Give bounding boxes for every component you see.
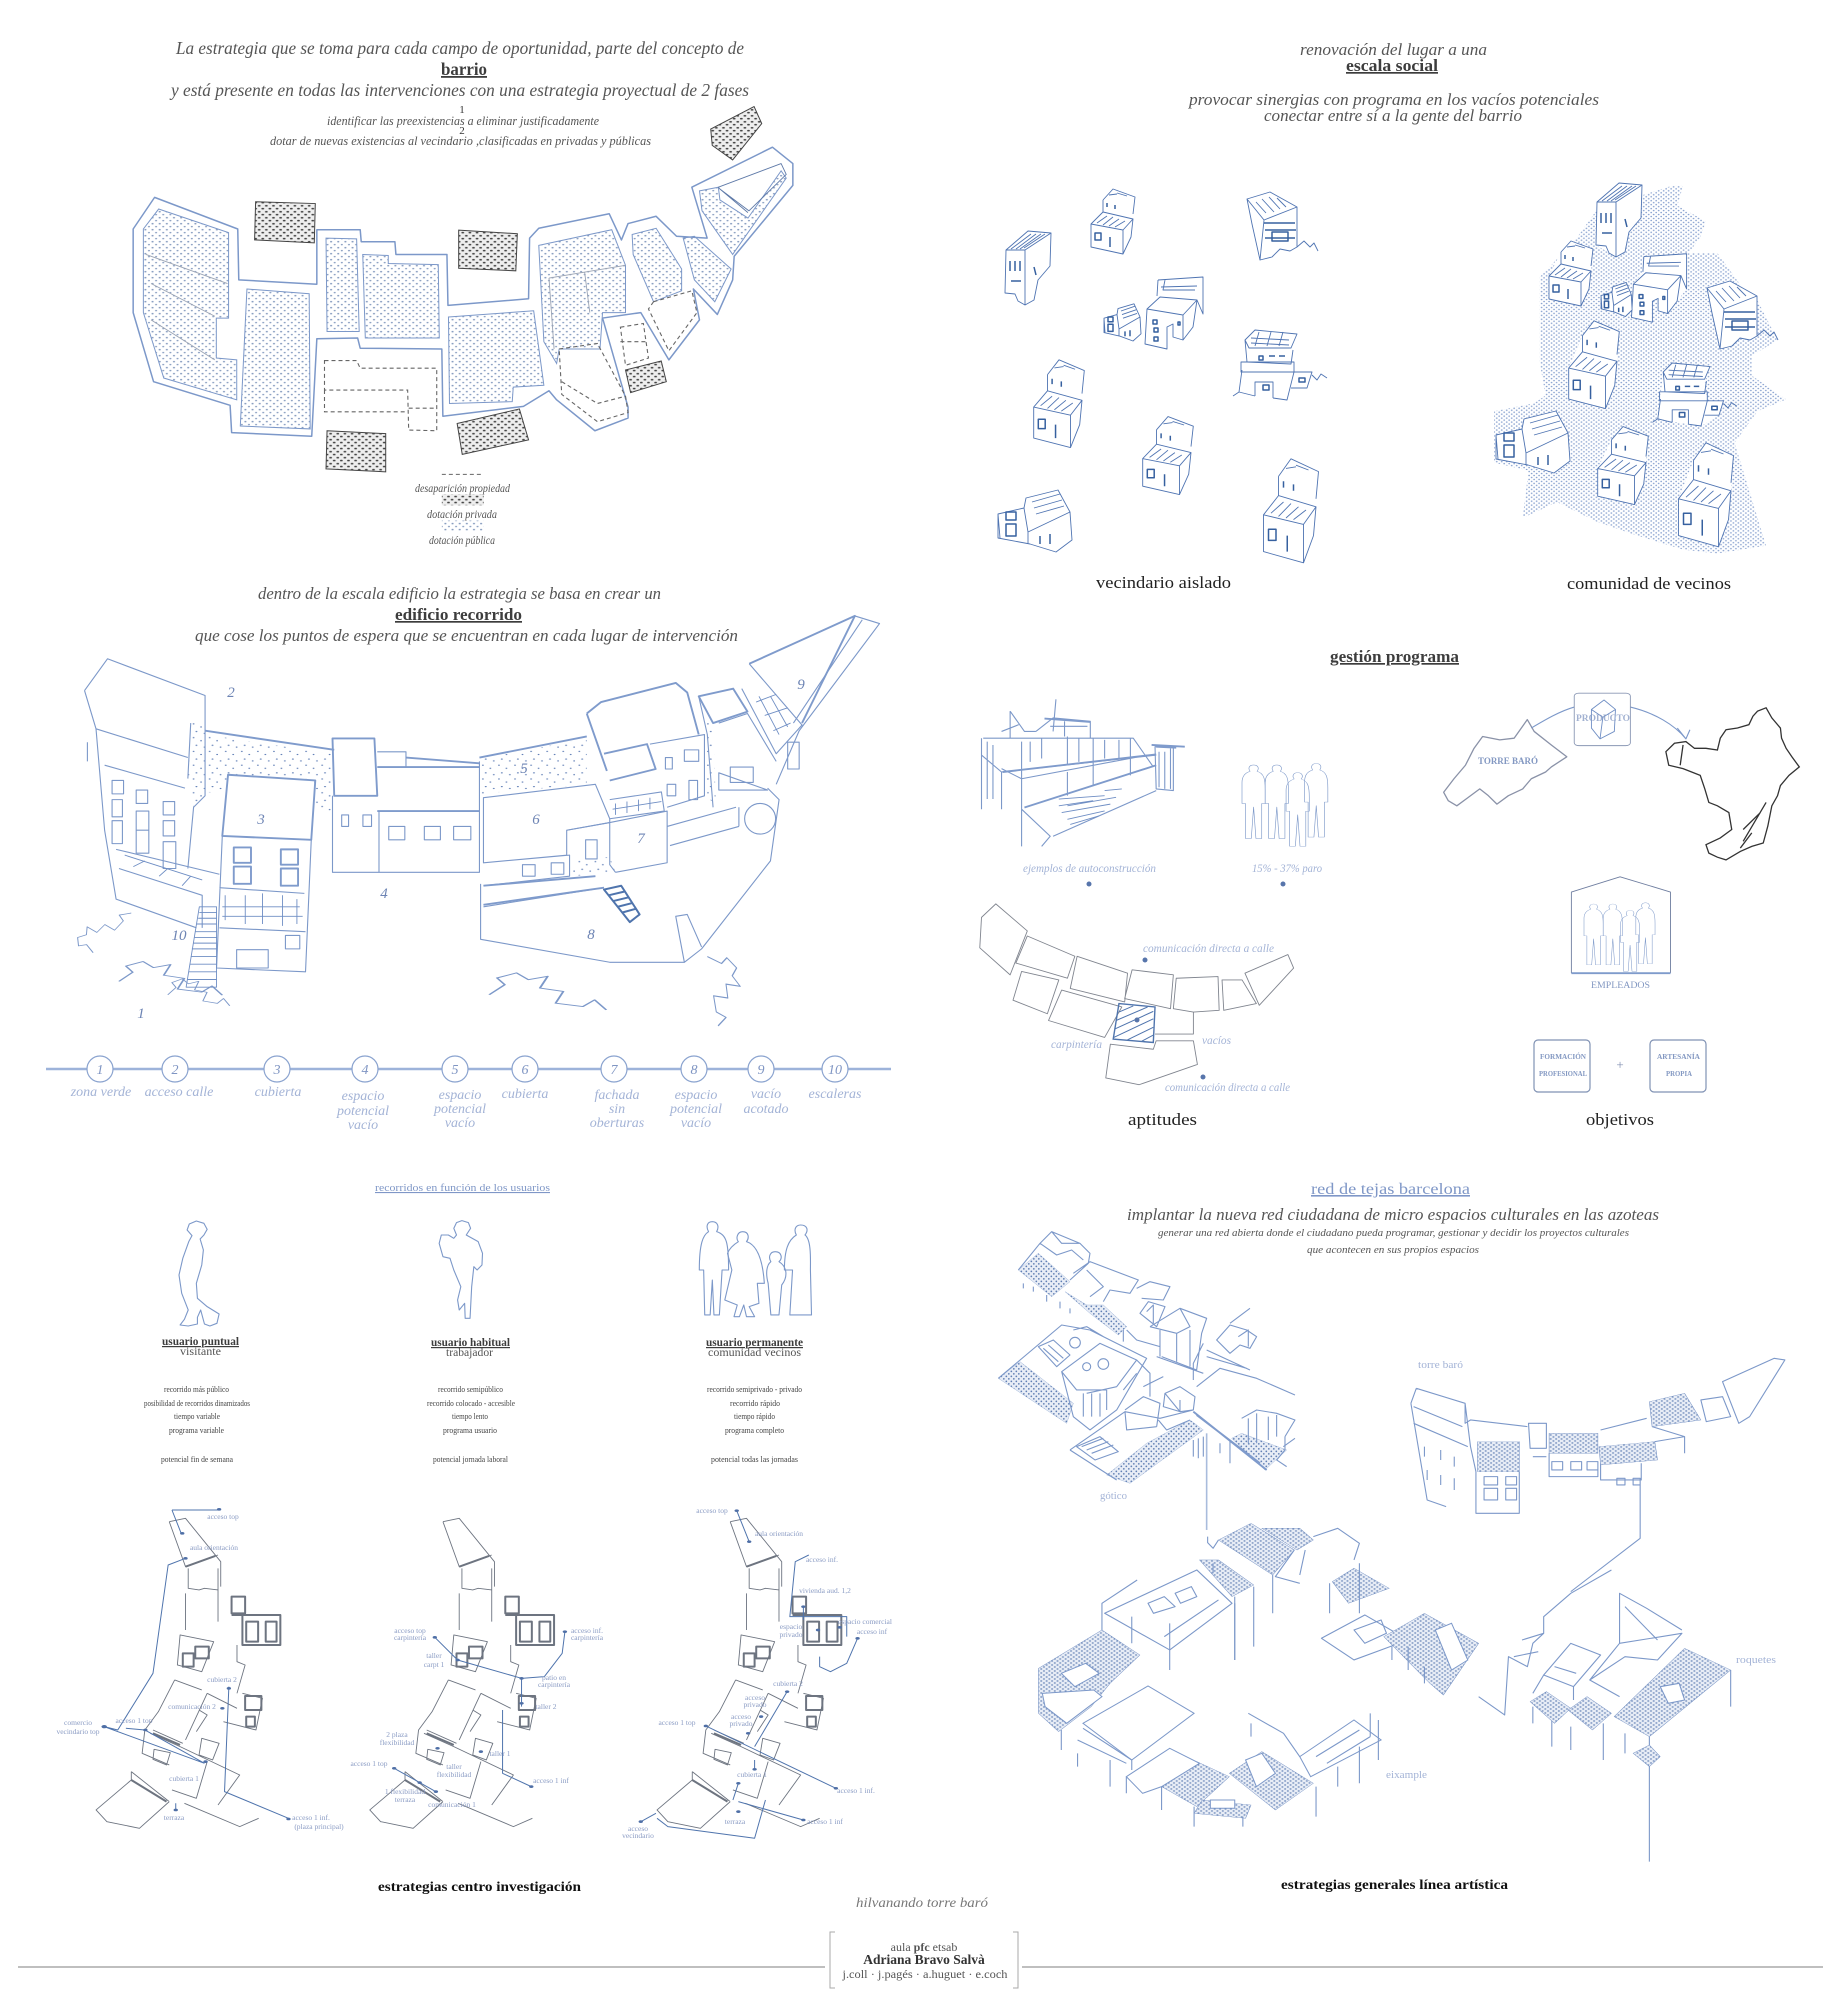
plan: aptitudes: vacíos bbox=[1202, 1033, 1231, 1047]
heading: edificio recorrido: que cose los puntos de espera que se encuentran en cada lugar de intervención bbox=[195, 626, 738, 645]
diagram: objectives boxes: + bbox=[1616, 1057, 1624, 1072]
plan: route community: espacio comercial bbox=[838, 1617, 892, 1626]
plan: route worker: taller 1 bbox=[489, 1749, 511, 1758]
diagram: product to Barcelona: TORRE BARÓ bbox=[1478, 756, 1538, 766]
footer bbox=[18, 1896, 1823, 1988]
plan: route community: acceso inf bbox=[857, 1627, 888, 1636]
column: usuario puntual: programa variable bbox=[169, 1426, 224, 1435]
plan: aptitudes: comunicación directa a calle bbox=[1143, 941, 1275, 955]
heading: escala social: conectar entre sí a la gente del barrio bbox=[1264, 106, 1522, 125]
plan: route community: privado bbox=[730, 1719, 753, 1728]
plan: aptitudes: carpintería bbox=[1051, 1037, 1102, 1051]
column: usuario habitual: recorrido colocado - accesible bbox=[427, 1399, 515, 1408]
illustration: ciutat vella axonometric bbox=[1105, 1523, 1408, 1660]
panel: social scale bbox=[998, 40, 1786, 593]
panel: edificio recorrido bbox=[46, 584, 891, 1133]
timeline: route stops: vacío bbox=[681, 1116, 711, 1131]
column: usuario habitual: programa usuario bbox=[443, 1426, 497, 1435]
caption: vecindario aislado: vecindario aislado bbox=[1096, 573, 1231, 592]
timeline: route stops: cubierta bbox=[255, 1085, 301, 1100]
illustration: isolated houses bbox=[998, 189, 1327, 563]
caption: objetivos: objetivos bbox=[1586, 1110, 1654, 1129]
caption: autoconstruccion: ejemplos de autoconstrucción bbox=[1023, 861, 1156, 875]
callouts: building numbers: 5 bbox=[520, 761, 528, 777]
caption: estrategias centro investigación: estrategias centro investigación bbox=[378, 1880, 581, 1895]
column: usuario puntual: potencial fin de semana bbox=[161, 1455, 233, 1464]
callouts: building numbers: 7 bbox=[637, 831, 646, 847]
plan: route visitor: acceso 1 inf. bbox=[292, 1813, 330, 1822]
heading: escala social: escala social bbox=[1346, 56, 1438, 75]
plan: route visitor bbox=[56, 1508, 344, 1831]
timeline: route stops: vacío bbox=[751, 1087, 781, 1102]
plan: route worker: taller bbox=[426, 1651, 442, 1660]
plan: route community: acceso 1 inf bbox=[807, 1817, 843, 1826]
plan: route worker: carpt 1 bbox=[424, 1660, 445, 1669]
timeline: route stops: 8 bbox=[690, 1063, 698, 1078]
plan: route worker: carpintería bbox=[538, 1680, 571, 1689]
plan: route worker: 2 plaza bbox=[386, 1730, 408, 1739]
callouts: building numbers: 1 bbox=[137, 1006, 145, 1022]
column: usuario puntual bbox=[144, 1221, 250, 1464]
illustration: eixample axonometric bbox=[1039, 1580, 1479, 1827]
column: usuario habitual bbox=[427, 1221, 515, 1464]
plan: route visitor: cubierta 2 bbox=[207, 1675, 237, 1684]
heading: barrio: barrio bbox=[441, 59, 487, 79]
illustration: connected community bbox=[1494, 183, 1786, 554]
plan: route worker: flexibilidad bbox=[437, 1770, 472, 1779]
diagram: objectives boxes: ARTESANÍA bbox=[1657, 1053, 1700, 1061]
legend bbox=[415, 474, 511, 547]
heading: edificio recorrido bbox=[195, 584, 738, 645]
plan: route visitor: (plaza principal) bbox=[294, 1822, 344, 1831]
plan: route worker: patio en bbox=[542, 1673, 566, 1682]
plan: route community: acceso top bbox=[696, 1506, 728, 1515]
column: usuario puntual: tiempo variable bbox=[174, 1412, 220, 1421]
column: usuario permanente: programa completo bbox=[725, 1426, 784, 1435]
heading: edificio recorrido: dentro de la escala edificio la estrategia se basa en crear un bbox=[258, 584, 661, 603]
plan: route worker: flexibilidad bbox=[380, 1738, 415, 1747]
divider line and brackets bbox=[18, 1932, 1823, 1988]
callouts: building numbers: 4 bbox=[380, 886, 388, 902]
label: roquetes: roquetes bbox=[1736, 1654, 1776, 1666]
heading: gestión programa: gestión programa bbox=[1330, 647, 1459, 666]
column: usuario permanente bbox=[699, 1222, 812, 1464]
heading: red de tejas: generar una red abierta donde el ciudadano pueda programar, gestionar y decidir los proyectos culturales bbox=[1158, 1227, 1629, 1239]
column: usuario permanente: usuario permanente bbox=[706, 1335, 804, 1349]
timeline: route stops bbox=[46, 1056, 891, 1133]
timeline: route stops: cubierta bbox=[502, 1087, 548, 1102]
caption: estrategias generales: estrategias generales línea artística bbox=[1281, 1878, 1508, 1893]
caption: autoconstruccion bbox=[1023, 861, 1156, 886]
column: usuario habitual: usuario habitual bbox=[431, 1335, 511, 1349]
plan: route visitor: acceso top bbox=[207, 1512, 239, 1521]
heading: escala social: provocar sinergias con programa en los vacíos potenciales bbox=[1188, 90, 1599, 109]
plan: route community: acceso bbox=[628, 1824, 648, 1833]
plan: neighbourhood interventions bbox=[133, 107, 793, 472]
credits: aula pfc etsab bbox=[891, 1940, 957, 1954]
column: usuario habitual: tiempo lento bbox=[452, 1412, 488, 1421]
plan: route community: acceso bbox=[745, 1693, 765, 1702]
diagram: product to Barcelona: PRODUCTO bbox=[1576, 713, 1630, 723]
timeline: route stops: 7 bbox=[610, 1063, 618, 1078]
heading: red de tejas: que acontecen en sus propios espacios bbox=[1307, 1244, 1479, 1256]
panel: red de tejas barcelona bbox=[998, 1181, 1785, 1893]
plan: route community: acceso inf. bbox=[806, 1555, 838, 1564]
plan: route worker: comunicación 1 bbox=[428, 1800, 476, 1809]
diagram: product to Barcelona bbox=[1444, 693, 1799, 860]
plan: route community bbox=[622, 1506, 892, 1840]
timeline: route stops: potencial bbox=[433, 1102, 486, 1117]
timeline: route stops: 10 bbox=[828, 1063, 842, 1078]
plan: route worker: carpintería bbox=[394, 1633, 427, 1642]
plan: route community: cubierta 1 bbox=[737, 1770, 767, 1779]
credits: Adriana Bravo Salvà bbox=[863, 1952, 985, 1967]
text: phases: 1 bbox=[459, 104, 465, 116]
illustration: building axonometric bbox=[72, 616, 880, 1026]
panel: barrio strategy bbox=[133, 38, 793, 547]
heading: escala social bbox=[1188, 40, 1599, 125]
panel: gestión programa bbox=[980, 647, 1799, 1129]
column: usuario permanente: tiempo rápido bbox=[734, 1412, 775, 1421]
timeline: route stops: zona verde bbox=[70, 1085, 131, 1100]
heading: barrio bbox=[169, 38, 749, 100]
plan: route community: espacio bbox=[780, 1622, 802, 1631]
heading: barrio: La estrategia que se toma para cada campo de oportunidad, parte del concepto de bbox=[175, 38, 744, 58]
caption: paro bbox=[1252, 861, 1322, 886]
column: usuario puntual: recorrido más público bbox=[164, 1385, 229, 1394]
plan: route community: acceso 1 top bbox=[658, 1718, 696, 1727]
plan: route worker: carpintería bbox=[571, 1633, 604, 1642]
heading: edificio recorrido: edificio recorrido bbox=[395, 605, 522, 624]
callouts: building numbers bbox=[137, 677, 805, 1022]
plan: route visitor: cubierta 1 bbox=[169, 1774, 199, 1783]
plan: route worker: acceso 1 top bbox=[350, 1759, 388, 1768]
plan: route worker: terraza bbox=[395, 1795, 416, 1804]
plan: route worker: acceso inf. bbox=[571, 1626, 603, 1635]
callouts: building numbers: 10 bbox=[172, 928, 187, 944]
caption: paro: 15% - 37% paro bbox=[1252, 861, 1322, 875]
heading: red de tejas bbox=[1127, 1181, 1659, 1256]
column: usuario permanente: recorrido rápido bbox=[730, 1399, 780, 1408]
text: phases: identificar las preexistencias a eliminar justificadamente bbox=[327, 114, 599, 128]
plan: route community: privado bbox=[744, 1700, 767, 1709]
illustration: roquetes axonometric bbox=[1479, 1570, 1731, 1862]
legend: dotación pública bbox=[429, 533, 495, 547]
plan: route visitor: comercio bbox=[64, 1718, 92, 1727]
plan: route visitor: aula orientación bbox=[190, 1543, 238, 1552]
diagram: objectives boxes bbox=[1534, 1040, 1706, 1092]
timeline: route stops: fachada bbox=[594, 1088, 640, 1103]
timeline: route stops: oberturas bbox=[590, 1116, 645, 1131]
diagram: employees house bbox=[1571, 877, 1670, 990]
text: phases: 2 bbox=[459, 125, 465, 137]
panel: recorridos usuarios bbox=[56, 1182, 892, 1895]
column: usuario habitual: trabajador bbox=[446, 1345, 493, 1359]
title: hilvanando torre baró: hilvanando torre baró bbox=[856, 1896, 988, 1911]
diagram: objectives boxes: PROFESIONAL bbox=[1539, 1070, 1587, 1078]
column: usuario puntual: visitante bbox=[180, 1344, 221, 1358]
timeline: route stops: acceso calle bbox=[145, 1085, 213, 1100]
illustration: self-construction sketch bbox=[981, 699, 1185, 846]
credits bbox=[841, 1940, 1008, 1981]
plan: route community: vivienda aud. 1,2 bbox=[799, 1586, 851, 1595]
timeline: route stops: escaleras bbox=[809, 1087, 862, 1102]
timeline: route stops: 6 bbox=[522, 1063, 528, 1078]
plan: route community: vecindario bbox=[622, 1831, 654, 1840]
heading: red de tejas: red de tejas barcelona bbox=[1311, 1181, 1470, 1198]
timeline: route stops: vacío bbox=[348, 1118, 378, 1133]
timeline: route stops: vacío bbox=[445, 1116, 475, 1131]
timeline: route stops: sin bbox=[609, 1102, 625, 1117]
plan: route worker: taller 2 bbox=[535, 1702, 557, 1711]
diagram: employees house: EMPLEADOS bbox=[1591, 980, 1650, 990]
legend: dotación privada bbox=[427, 507, 497, 521]
plan: route worker: 1 flexibilidad bbox=[385, 1787, 425, 1796]
callouts: building numbers: 3 bbox=[256, 812, 265, 828]
column: usuario puntual: usuario puntual bbox=[162, 1334, 240, 1348]
callouts: building numbers: 9 bbox=[797, 677, 805, 693]
timeline: route stops: potencial bbox=[336, 1104, 389, 1119]
heading: recorridos: recorridos en función de los usuarios bbox=[375, 1182, 550, 1194]
plan: aptitudes bbox=[980, 904, 1294, 1094]
timeline: route stops: 3 bbox=[272, 1063, 280, 1078]
timeline: route stops: espacio bbox=[675, 1088, 717, 1103]
plan: route visitor: terraza bbox=[164, 1813, 185, 1822]
text: phases: dotar de nuevas existencias al vecindario ,clasificadas en privadas y públicas bbox=[270, 134, 651, 148]
plan: route worker bbox=[350, 1518, 604, 1828]
column: usuario permanente: recorrido semiprivado - privado bbox=[707, 1385, 802, 1394]
plan: route community: terraza bbox=[725, 1817, 746, 1826]
plan: route community: privado bbox=[780, 1630, 803, 1639]
credits: j.coll · j.pagés · a.huguet · e.coch bbox=[841, 1967, 1008, 1981]
plan: route visitor: comunicación 2 bbox=[168, 1702, 216, 1711]
plan: route worker: acceso 1 inf bbox=[533, 1776, 569, 1785]
callouts: building numbers: 6 bbox=[532, 812, 540, 828]
callouts: building numbers: 2 bbox=[227, 685, 235, 701]
plan: route community: aula orientación bbox=[755, 1529, 803, 1538]
column: usuario habitual: recorrido semipúblico bbox=[438, 1385, 503, 1394]
caption: aptitudes: aptitudes bbox=[1128, 1110, 1197, 1129]
heading: red de tejas: implantar la nueva red ciudadana de micro espacios culturales en las azoteas bbox=[1127, 1205, 1659, 1224]
label: eixample: eixample bbox=[1386, 1769, 1427, 1781]
timeline: route stops: espacio bbox=[439, 1088, 481, 1103]
column: usuario permanente: comunidad vecinos bbox=[708, 1345, 801, 1359]
plan: route community: acceso bbox=[731, 1712, 751, 1721]
caption: comunidad de vecinos: comunidad de vecinos bbox=[1567, 574, 1731, 593]
timeline: route stops: acotado bbox=[743, 1102, 789, 1117]
label: torre baró: torre baró bbox=[1418, 1359, 1464, 1371]
diagram: objectives boxes: PROPIA bbox=[1666, 1070, 1692, 1078]
icon: unemployed people bbox=[1242, 764, 1328, 846]
plan: route visitor: vecindario top bbox=[56, 1727, 100, 1736]
column: usuario puntual: posibilidad de recorridos dinamizados bbox=[144, 1399, 250, 1408]
plan: route visitor: acceso 1 top bbox=[115, 1716, 153, 1725]
illustration: torre baró axonometric bbox=[1411, 1358, 1785, 1592]
heading: barrio: y está presente en todas las intervenciones con una estrategia proyectual de 2 fases bbox=[169, 80, 749, 100]
timeline: route stops: 9 bbox=[758, 1063, 764, 1078]
legend: desaparición propiedad bbox=[415, 481, 511, 495]
plan: aptitudes: comunicación directa a calle bbox=[1165, 1080, 1291, 1094]
timeline: route stops: 2 bbox=[172, 1063, 178, 1078]
illustration: gótico axonometric bbox=[998, 1232, 1295, 1530]
callouts: building numbers: 8 bbox=[587, 927, 595, 943]
column: usuario permanente: potencial todas las jornadas bbox=[711, 1455, 798, 1464]
timeline: route stops: 4 bbox=[362, 1063, 368, 1078]
timeline: route stops: 5 bbox=[452, 1063, 458, 1078]
timeline: route stops: 1 bbox=[96, 1063, 104, 1078]
timeline: route stops: espacio bbox=[342, 1089, 384, 1104]
label: gótico: gótico bbox=[1100, 1490, 1127, 1502]
text: phases bbox=[270, 104, 651, 148]
timeline: route stops: potencial bbox=[669, 1102, 722, 1117]
plan: route worker: acceso top bbox=[394, 1626, 426, 1635]
diagram: objectives boxes: FORMACIÓN bbox=[1540, 1053, 1586, 1061]
plan: route community: acceso 1 inf. bbox=[837, 1786, 875, 1795]
plan: route worker: taller bbox=[446, 1762, 462, 1771]
column: usuario habitual: potencial jornada laboral bbox=[433, 1455, 509, 1464]
heading: escala social: renovación del lugar a una bbox=[1300, 40, 1487, 59]
plan: route community: cubierta 2 bbox=[773, 1679, 803, 1688]
